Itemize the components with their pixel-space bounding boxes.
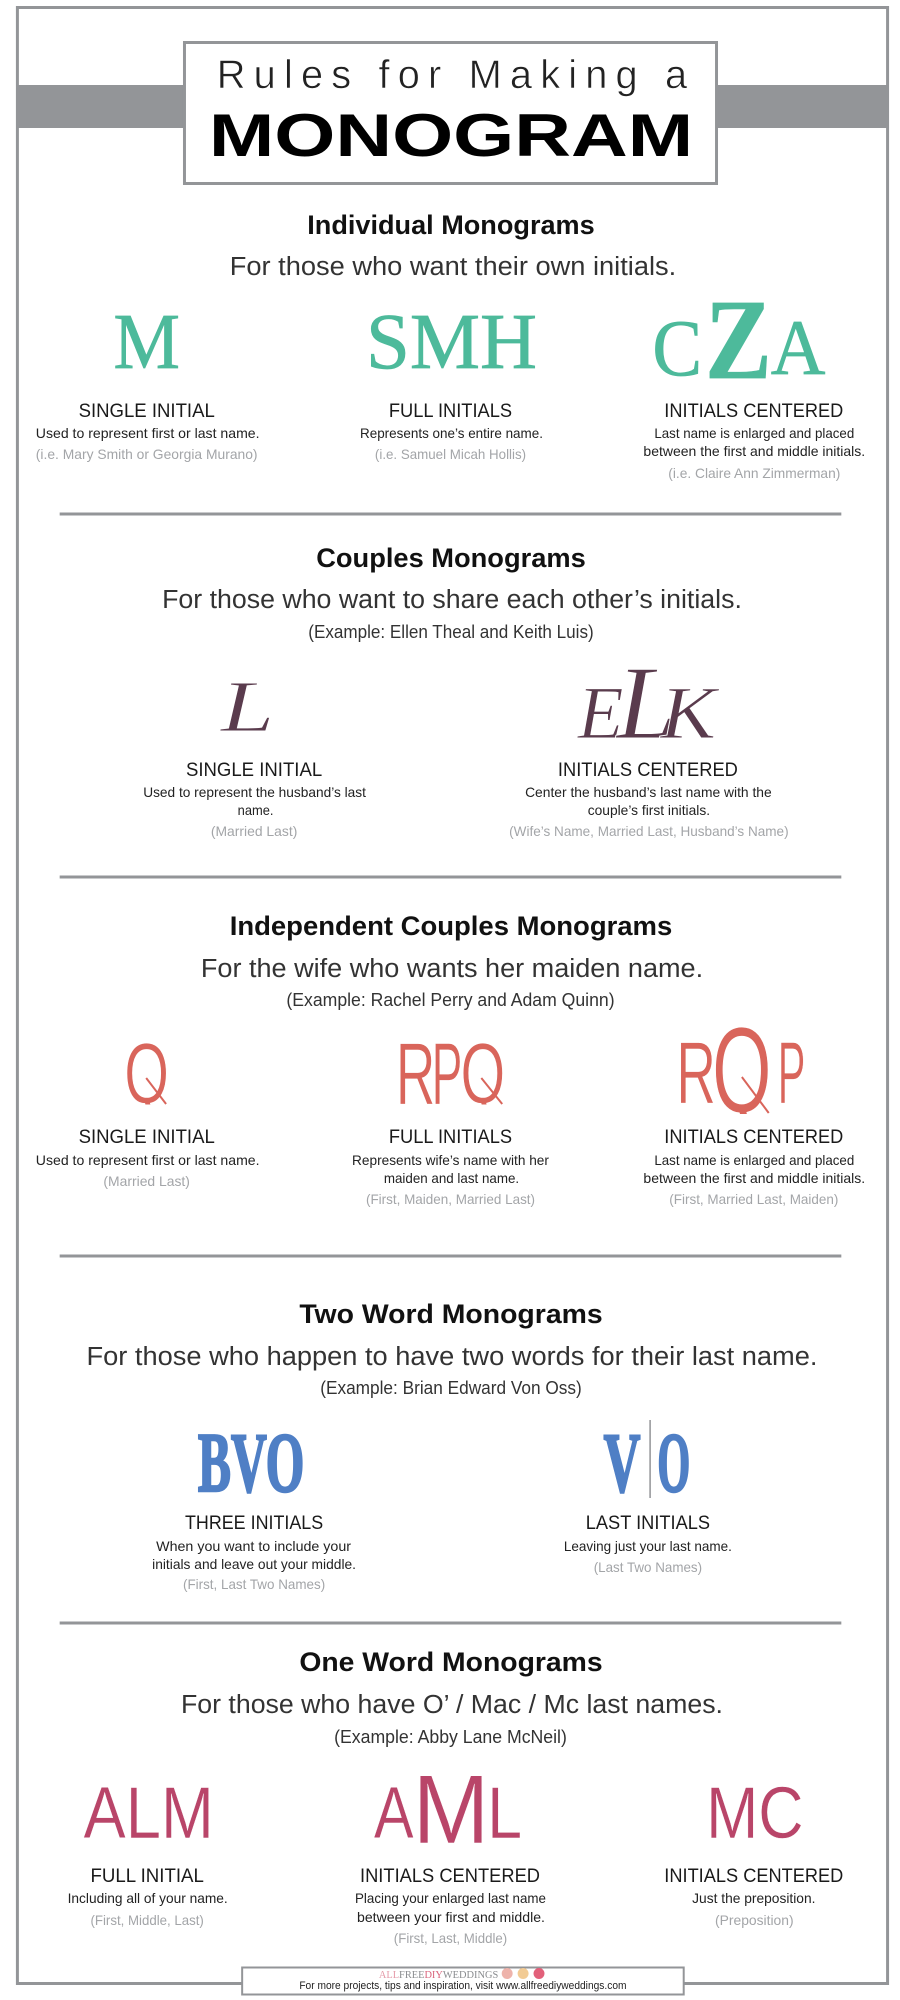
monogram: ELK: K — [659, 672, 721, 755]
subheading: For those who have O’ / Mac / Mc last names. — [181, 1691, 723, 1719]
panel: independent couples monograms — [36, 911, 865, 1207]
monogram: MC: MC — [706, 1773, 804, 1854]
column: initials centered: couple’s first initials. — [588, 803, 710, 818]
column: initials centered: INITIALS CENTERED — [664, 1127, 843, 1148]
monogram: RPQ: Q — [460, 1026, 505, 1121]
column: single initial — [143, 760, 366, 839]
title box — [184, 42, 717, 184]
panel: two word monograms — [87, 1299, 817, 1592]
monogram: ALM: ALM — [84, 1773, 214, 1854]
column: full initials: (i.e. Samuel Micah Hollis) — [375, 447, 526, 462]
column: full initials: FULL INITIALS — [389, 401, 512, 422]
footer text: For more projects, tips and inspiration, visit www.allfreediyweddings.com — [299, 1980, 627, 1992]
column: three initials: THREE INITIALS — [185, 1513, 323, 1534]
monogram: CZA: Z — [705, 277, 772, 403]
column: single initial: (Married Last) — [103, 1174, 190, 1189]
column: full initials — [352, 1127, 549, 1207]
monogram: SMH: SMH — [366, 299, 537, 386]
column: single initial: SINGLE INITIAL — [79, 1127, 215, 1148]
column: full initials: (First, Maiden, Married Last) — [366, 1192, 535, 1207]
column: single initial: Used to represent first or last name. — [36, 1153, 260, 1168]
subheading: For those who happen to have two words for their last name. — [87, 1343, 817, 1371]
subheading: For those who want to share each other’s initials. — [162, 586, 742, 614]
column: initials centered — [509, 760, 789, 839]
title line 2: MONOGRAM — [209, 102, 693, 169]
column: initials centered: Last name is enlarged and placed — [654, 426, 854, 441]
heading: Couples Monograms — [316, 543, 586, 573]
monogram: ELK — [577, 645, 721, 761]
monogram: CZA: C — [652, 305, 702, 393]
example: (Example: Abby Lane McNeil) — [334, 1727, 567, 1747]
monogram: CZA — [652, 277, 825, 403]
heading: Independent Couples Monograms — [230, 911, 672, 941]
monogram: BVO: BVO — [198, 1416, 304, 1510]
column: preposition — [664, 1866, 843, 1928]
column: single initial: (Married Last) — [211, 824, 297, 839]
footer box — [242, 1968, 684, 1994]
monogram: M: M — [113, 299, 180, 386]
monogram: V|O: V — [604, 1416, 640, 1510]
column: initials centered — [643, 401, 865, 481]
column: three initials: initials and leave out your middle. — [152, 1557, 356, 1572]
monogram: RPQ — [400, 1043, 503, 1105]
monogram: RQP: Q — [712, 1002, 772, 1138]
column: full initial — [68, 1866, 228, 1928]
monogram: Q: Q — [124, 1026, 169, 1121]
panel: two word monograms: O — [657, 1416, 690, 1510]
column: initials centered — [643, 1127, 865, 1207]
column: single initial: SINGLE INITIAL — [186, 760, 322, 781]
subheading: For the wife who wants her maiden name. — [201, 955, 703, 983]
column: last initials: Leaving just your last name. — [564, 1539, 732, 1554]
column: full initials: Represents one’s entire name. — [360, 426, 543, 441]
monogram: L: L — [219, 666, 274, 747]
column: single initial: Used to represent the husband’s last — [143, 785, 366, 800]
monogram: RQP — [681, 1027, 804, 1114]
column: full initials — [360, 401, 543, 462]
icon: social circles — [502, 1968, 544, 1979]
example: (Example: Rachel Perry and Adam Quinn) — [286, 990, 615, 1010]
monogram: ELK: L — [615, 645, 676, 761]
heading: Individual Monograms — [307, 210, 595, 240]
column: initials centered: between your first and middle. — [357, 1910, 545, 1925]
column: initials centered: INITIALS CENTERED — [664, 401, 843, 422]
column: initials centered: (First, Last, Middle) — [394, 1931, 507, 1946]
column: initials centered: Placing your enlarged last name — [355, 1891, 546, 1906]
panel: individual monograms — [36, 210, 865, 481]
column: full initials: FULL INITIALS — [389, 1127, 512, 1148]
column: initials centered: Last name is enlarged and placed — [654, 1153, 854, 1168]
monogram: AML — [374, 1756, 522, 1864]
column: full initial: Including all of your name. — [68, 1891, 228, 1906]
column: initials centered: INITIALS CENTERED — [360, 1866, 540, 1887]
column: initials centered: INITIALS CENTERED — [558, 760, 738, 781]
monogram: ELK: E — [577, 672, 624, 755]
column: single initial: SINGLE INITIAL — [79, 401, 215, 422]
column: preposition: Just the preposition. — [692, 1891, 815, 1906]
column: initials centered: (First, Married Last, Maiden) — [669, 1192, 838, 1207]
subheading: For those who want their own initials. — [230, 253, 676, 281]
column: preposition: (Preposition) — [715, 1913, 794, 1928]
example: (Example: Ellen Theal and Keith Luis) — [308, 622, 594, 642]
monogram: AML: M — [413, 1756, 489, 1864]
column: initials centered — [355, 1866, 546, 1946]
column: full initials: maiden and last name. — [384, 1171, 519, 1186]
column: initials centered: between the first and middle initials. — [643, 444, 865, 459]
column: preposition: INITIALS CENTERED — [664, 1866, 843, 1887]
panel: one word monograms — [68, 1647, 843, 1946]
column: full initial: FULL INITIAL — [90, 1866, 204, 1887]
monogram: AML: L — [487, 1773, 522, 1854]
panel: independent couples monograms: P — [778, 1024, 806, 1122]
column: initials centered: between the first and middle initials. — [643, 1171, 865, 1186]
monogram: RPQ: R — [396, 1025, 436, 1123]
column: last initials: (Last Two Names) — [594, 1560, 702, 1575]
monogram: Q — [127, 1043, 167, 1105]
monogram: RPQ: P — [432, 1025, 462, 1123]
monogram: CZA: A — [771, 305, 825, 391]
panel: couples monograms — [143, 543, 789, 839]
header band — [17, 85, 888, 128]
column: three initials: (First, Last Two Names) — [183, 1577, 325, 1592]
heading: One Word Monograms — [299, 1647, 603, 1677]
column: single initial — [36, 1127, 260, 1189]
heading: Two Word Monograms — [299, 1299, 603, 1329]
column: single initial: Used to represent first or last name. — [36, 426, 260, 441]
column: single initial: (i.e. Mary Smith or Georgia Murano) — [36, 447, 258, 462]
column: single initial — [36, 401, 260, 462]
column: three initials — [152, 1513, 356, 1592]
column: initials centered: (i.e. Claire Ann Zimmerman) — [668, 466, 840, 481]
column: three initials: When you want to include your — [156, 1539, 352, 1554]
monogram: RQP: R — [676, 1024, 716, 1122]
monogram: AML: A — [374, 1773, 414, 1854]
column: full initial: (First, Middle, Last) — [90, 1913, 204, 1928]
title line 1: Rules for Making a — [217, 53, 688, 97]
footer logo text: ALLFREEDIYWEDDINGS — [379, 1970, 498, 1981]
column: single initial: name. — [238, 803, 273, 818]
column: full initials: Represents wife’s name with her — [352, 1153, 549, 1168]
column: last initials — [564, 1513, 732, 1575]
column: last initials: LAST INITIALS — [586, 1513, 710, 1534]
column: initials centered: Center the husband’s last name with the — [525, 785, 772, 800]
example: (Example: Brian Edward Von Oss) — [320, 1378, 582, 1398]
column: initials centered: (Wife’s Name, Married Last, Husband’s Name) — [509, 824, 789, 839]
